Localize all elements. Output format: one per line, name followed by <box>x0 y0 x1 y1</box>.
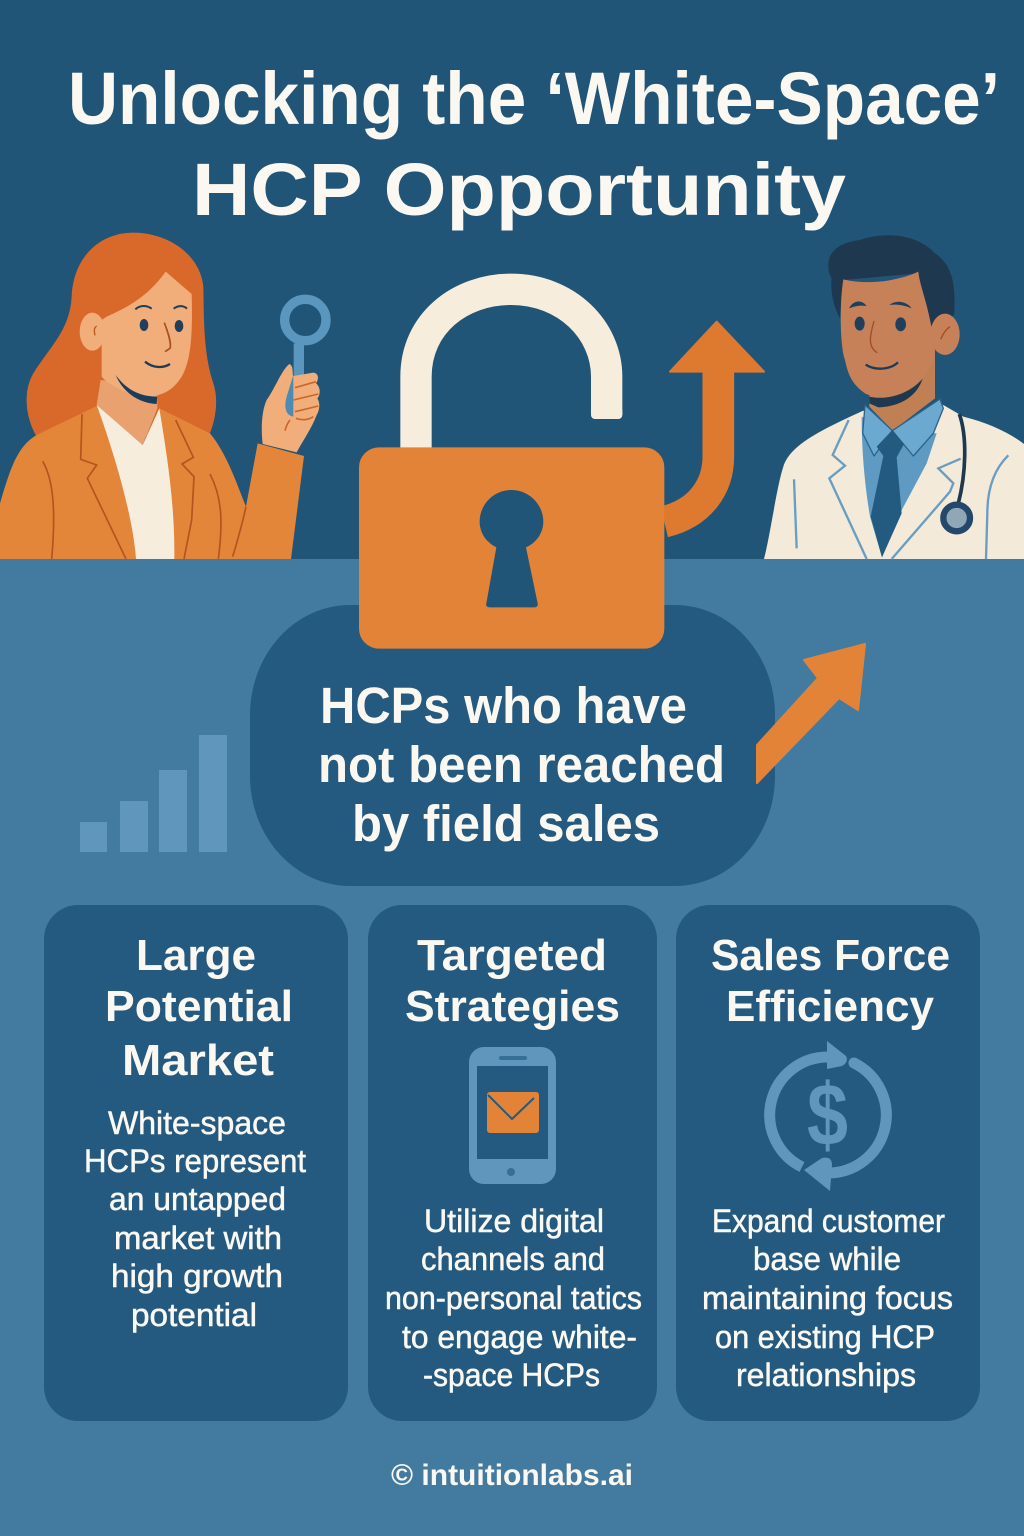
text: large potential market body <box>84 1105 306 1333</box>
text: central definition <box>318 677 725 852</box>
text: targeted strategies body: Utilize digital <box>424 1203 604 1239</box>
footer credit: © intuitionlabs.ai <box>391 1459 633 1492</box>
chart: rising bars <box>80 735 227 852</box>
icon: smartphone with envelope <box>469 1047 556 1184</box>
heading: large potential market: Market <box>122 1036 274 1085</box>
text: targeted strategies body: non-personal tatics <box>385 1280 642 1316</box>
title: HCP Opportunity <box>192 148 846 231</box>
panel: sales force efficiency <box>676 905 980 1421</box>
text: targeted strategies body: -space HCPs <box>423 1357 600 1393</box>
text: large potential market body: market with <box>114 1220 282 1256</box>
text: large potential market body: potential <box>131 1297 257 1333</box>
icon: dollar cycle <box>770 1041 886 1191</box>
top background band <box>0 0 1024 559</box>
text: large potential market body: an untapped <box>109 1181 286 1217</box>
heading: large potential market <box>105 931 293 1085</box>
text: sales force efficiency body: relationships <box>736 1357 916 1393</box>
heading: sales force efficiency: Sales Force <box>711 931 950 980</box>
panel: targeted strategies <box>368 905 657 1421</box>
icon: padlock with rising arrow <box>359 289 764 649</box>
text: targeted strategies body: to engage white- <box>402 1319 637 1355</box>
text: sales force efficiency body: base while <box>753 1241 901 1277</box>
panel: central definition pill <box>250 605 775 886</box>
text: targeted strategies body <box>385 1203 642 1393</box>
text: large potential market body: HCPs represent <box>84 1143 306 1179</box>
text: sales force efficiency body: on existing HCP <box>715 1319 935 1355</box>
panel: large potential market <box>44 905 348 1421</box>
text: targeted strategies body: channels and <box>421 1241 605 1277</box>
heading: large potential market: Large <box>136 931 256 980</box>
heading: targeted strategies <box>405 931 620 1031</box>
heading: sales force efficiency <box>711 931 950 1031</box>
text: central definition: HCPs who have <box>320 677 687 734</box>
illustration: woman holding key <box>0 233 326 559</box>
illustration: doctor with stethoscope <box>764 235 1024 559</box>
text: sales force efficiency body: maintaining focus <box>702 1280 953 1316</box>
text: large potential market body: high growth <box>111 1258 283 1294</box>
heading: large potential market: Potential <box>105 982 293 1031</box>
heading: sales force efficiency: Efficiency <box>726 982 935 1031</box>
title <box>68 57 1000 231</box>
heading: targeted strategies: Strategies <box>405 982 620 1031</box>
text: sales force efficiency body: Expand customer <box>712 1203 945 1239</box>
text: sales force efficiency body <box>702 1203 953 1393</box>
icon: dollar cycle: $ <box>807 1065 848 1164</box>
text: central definition: by field sales <box>352 795 660 852</box>
text: large potential market body: White-space <box>108 1105 286 1141</box>
bottom background band <box>0 559 1024 1536</box>
arrow: diagonal growth arrow <box>757 644 865 783</box>
text: central definition: not been reached <box>318 736 725 793</box>
heading: targeted strategies: Targeted <box>417 931 607 980</box>
